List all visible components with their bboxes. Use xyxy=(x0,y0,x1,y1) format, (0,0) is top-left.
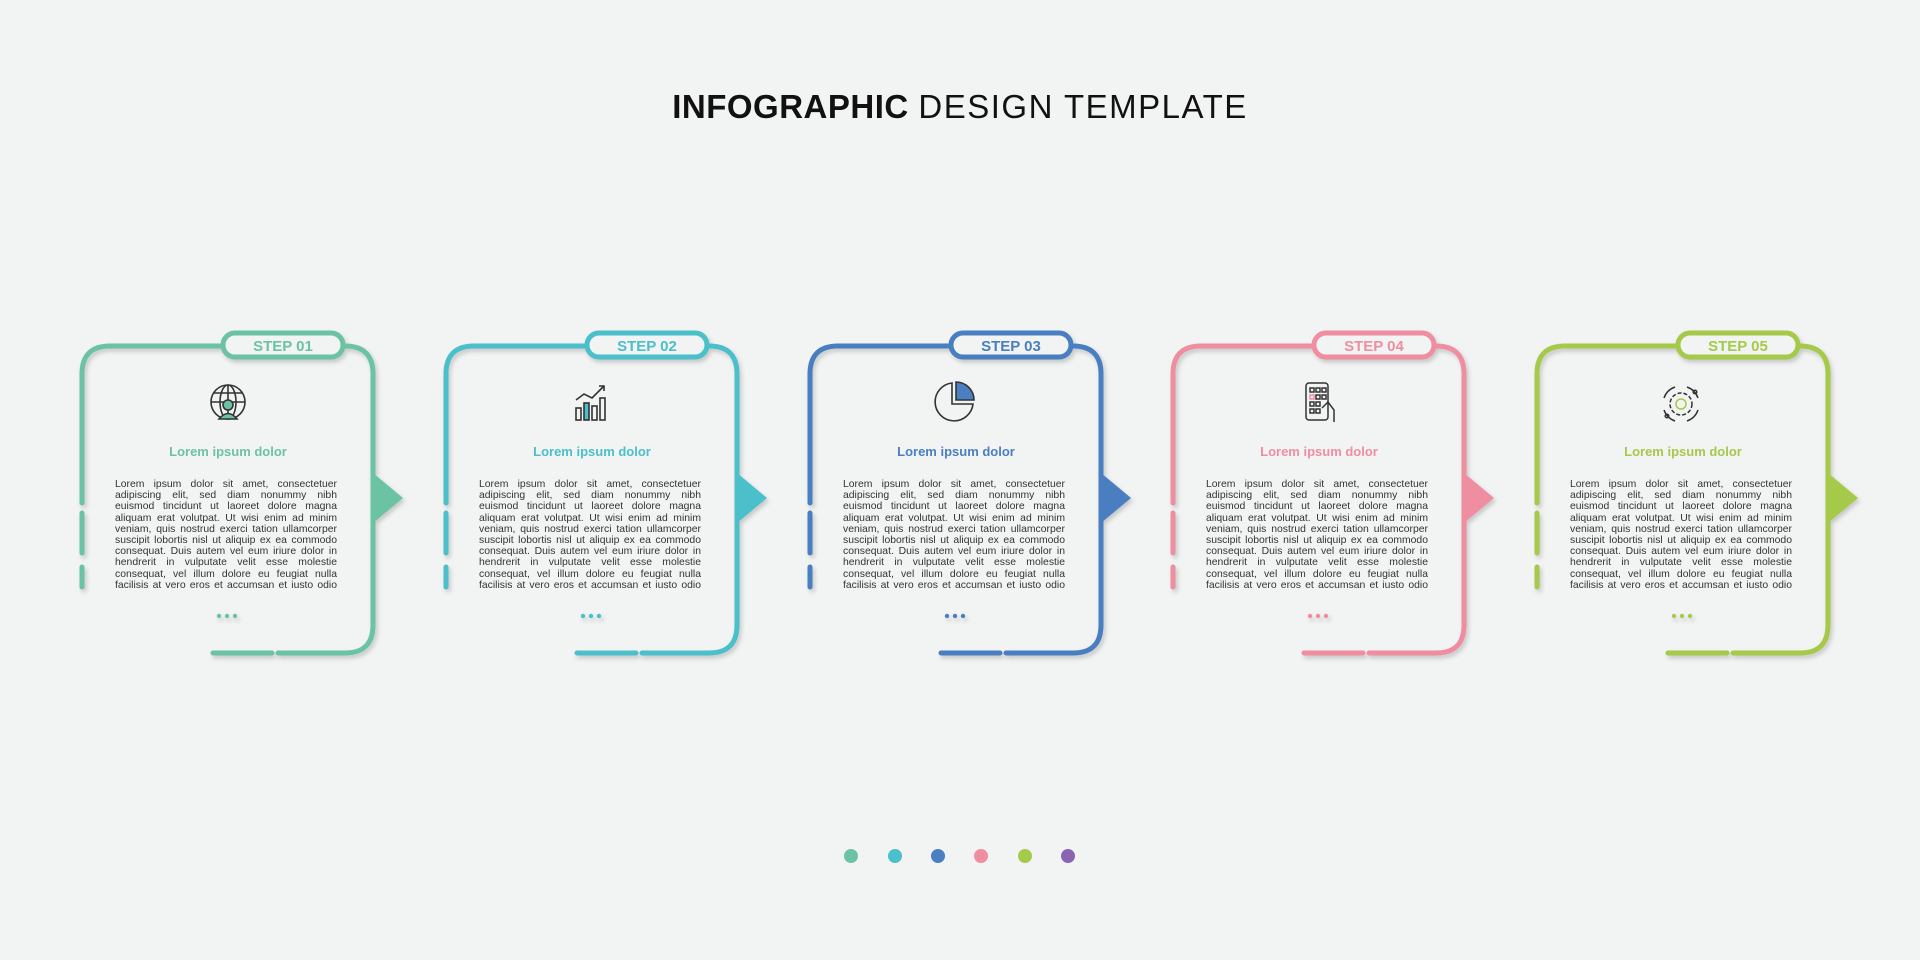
panel: step 02 frame xyxy=(446,333,767,653)
text block: step 05: veniam, quis nostrud exerci tation ullamcorper xyxy=(1570,524,1792,535)
text block: step 04: hendrerit in vulputate velit esse molestie xyxy=(1206,557,1428,568)
panel: step 01 frame: STEP 01 xyxy=(253,338,313,355)
text block: step 02: adipiscing elit, sed diam nonummy nibh xyxy=(479,490,701,501)
text block: step 01: consequat, vel illum dolore eu feugiat nulla xyxy=(115,568,337,580)
text block: step 05: euismod tincidunt ut laoreet dolore magna xyxy=(1570,501,1792,512)
panel: step 05 frame: STEP 05 xyxy=(1708,338,1768,355)
text block: step 03: adipiscing elit, sed diam nonummy nibh xyxy=(843,490,1065,501)
text block: step 05: Lorem ipsum dolor sit amet, consectetuer xyxy=(1570,479,1792,490)
text block: step 05: suscipit lobortis nisl ut aliquip ex ea commodo xyxy=(1570,535,1792,546)
heading: step 01: Lorem ipsum dolor xyxy=(169,444,287,459)
text block: step 04: suscipit lobortis nisl ut aliquip ex ea commodo xyxy=(1206,535,1428,546)
icon: tablet hand xyxy=(1306,383,1334,422)
icon: gear cycle xyxy=(1664,387,1698,421)
text block: step 03: euismod tincidunt ut laoreet dolore magna xyxy=(843,501,1065,512)
text block: step 01: adipiscing elit, sed diam nonummy nibh xyxy=(115,490,337,501)
text block: step 03: aliquam erat volutpat. Ut wisi enim ad minim xyxy=(843,513,1065,524)
text block: step 01 xyxy=(115,479,338,591)
text block: step 01: euismod tincidunt ut laoreet dolore magna xyxy=(115,501,337,512)
text block: step 03 xyxy=(843,479,1066,591)
text block: step 01: Lorem ipsum dolor sit amet, consectetuer xyxy=(115,479,337,490)
text block: step 05: consequat, vel illum dolore eu feugiat nulla xyxy=(1570,568,1792,580)
heading: step 05: Lorem ipsum dolor xyxy=(1624,444,1742,459)
text block: step 02: facilisis at vero eros et accumsan et iusto odio xyxy=(479,580,701,591)
text block: step 04: aliquam erat volutpat. Ut wisi enim ad minim xyxy=(1206,513,1428,524)
icon: pie chart xyxy=(935,382,974,421)
text block: step 02: consequat, vel illum dolore eu feugiat nulla xyxy=(479,568,701,580)
text block: step 03: suscipit lobortis nisl ut aliquip ex ea commodo xyxy=(843,535,1065,546)
heading: step 04: Lorem ipsum dolor xyxy=(1260,444,1378,459)
panel: step 04 frame xyxy=(1173,333,1494,653)
legend dots xyxy=(844,849,1075,863)
icon: bar chart xyxy=(576,386,605,420)
panel: step 03 frame xyxy=(810,333,1131,653)
text block: step 02: aliquam erat volutpat. Ut wisi enim ad minim xyxy=(479,513,701,524)
text block: step 03: facilisis at vero eros et accumsan et iusto odio xyxy=(843,580,1065,591)
panel: step 04 frame: STEP 04 xyxy=(1344,338,1405,355)
text block: step 04: consequat. Duis autem vel eum iriure dolor in xyxy=(1206,546,1428,557)
panel: step 03 frame: STEP 03 xyxy=(981,338,1041,355)
text block: step 04 xyxy=(1206,479,1428,591)
panel: step 01 frame xyxy=(82,333,403,653)
text block: step 04: adipiscing elit, sed diam nonummy nibh xyxy=(1206,490,1428,501)
text block: step 02: suscipit lobortis nisl ut aliquip ex ea commodo xyxy=(479,535,701,546)
text block: step 02: euismod tincidunt ut laoreet dolore magna xyxy=(479,501,701,512)
text block: step 01: aliquam erat volutpat. Ut wisi enim ad minim xyxy=(115,513,337,524)
text block: step 04: facilisis at vero eros et accumsan et iusto odio xyxy=(1206,580,1428,591)
text block: step 03: consequat, vel illum dolore eu feugiat nulla xyxy=(843,568,1065,580)
text block: step 04: euismod tincidunt ut laoreet dolore magna xyxy=(1206,501,1428,512)
text block: step 02: hendrerit in vulputate velit esse molestie xyxy=(479,557,701,568)
text block: step 01: veniam, quis nostrud exerci tation ullamcorper xyxy=(115,524,337,535)
text block: step 01: facilisis at vero eros et accumsan et iusto odio xyxy=(115,580,337,591)
text block: step 05: consequat. Duis autem vel eum iriure dolor in xyxy=(1570,546,1792,557)
text block: step 04: consequat, vel illum dolore eu feugiat nulla xyxy=(1206,568,1428,580)
text block: step 05: aliquam erat volutpat. Ut wisi enim ad minim xyxy=(1570,513,1792,524)
panel: step 05 frame xyxy=(1537,333,1858,653)
text block: step 02 xyxy=(479,479,702,591)
text block: step 04: veniam, quis nostrud exerci tation ullamcorper xyxy=(1206,524,1428,535)
text block: step 02: veniam, quis nostrud exerci tation ullamcorper xyxy=(479,524,701,535)
heading: step 03: Lorem ipsum dolor xyxy=(897,444,1015,459)
text block: step 05: adipiscing elit, sed diam nonummy nibh xyxy=(1570,490,1792,501)
text block: step 01: suscipit lobortis nisl ut aliquip ex ea commodo xyxy=(115,535,337,546)
text block: step 05 xyxy=(1570,479,1792,591)
text block: step 01: hendrerit in vulputate velit esse molestie xyxy=(115,557,337,568)
text block: step 03: veniam, quis nostrud exerci tation ullamcorper xyxy=(843,524,1065,535)
text block: step 03: Lorem ipsum dolor sit amet, consectetuer xyxy=(843,479,1065,490)
text block: step 01: consequat. Duis autem vel eum iriure dolor in xyxy=(115,546,337,557)
text block: step 03: consequat. Duis autem vel eum iriure dolor in xyxy=(843,546,1065,557)
panel: step 02 frame: STEP 02 xyxy=(617,338,677,355)
heading: step 02: Lorem ipsum dolor xyxy=(533,444,651,459)
text block: step 03: hendrerit in vulputate velit esse molestie xyxy=(843,557,1065,568)
icon: globe people xyxy=(211,385,245,419)
text block: step 04: Lorem ipsum dolor sit amet, consectetuer xyxy=(1206,479,1428,490)
title: INFOGRAPHIC DESIGN TEMPLATE xyxy=(672,88,1248,125)
text block: step 02: consequat. Duis autem vel eum iriure dolor in xyxy=(479,546,701,557)
text block: step 05: hendrerit in vulputate velit esse molestie xyxy=(1570,557,1792,568)
text block: step 05: facilisis at vero eros et accumsan et iusto odio xyxy=(1570,580,1792,591)
text block: step 02: Lorem ipsum dolor sit amet, consectetuer xyxy=(479,479,701,490)
